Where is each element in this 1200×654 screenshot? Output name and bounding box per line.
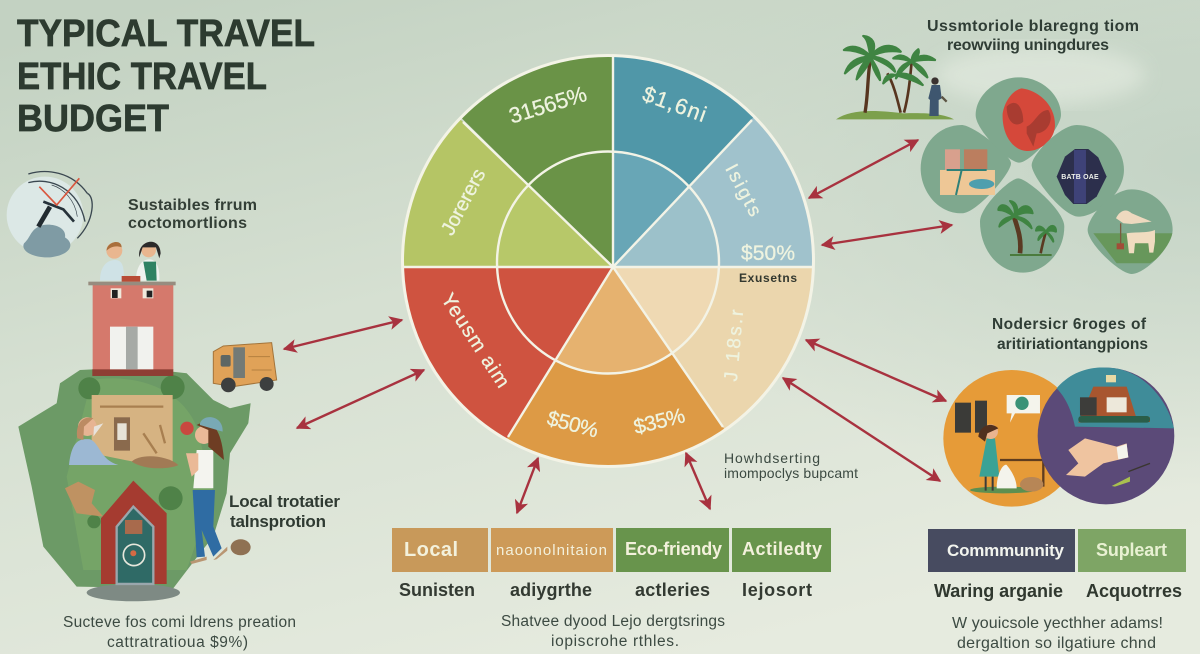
text: pie note: imompoclys bupcamt [724,465,858,481]
pie labels: $50% [545,407,601,443]
bottom budget boxes: naoonolnitaion [496,542,607,559]
title: TYPICAL TRAVEL [17,13,315,55]
bottom budget boxes: Actiledty [742,539,822,559]
text: pie note: Howhdserting [724,450,820,466]
blob: dark badge: BATB OAE [1061,174,1099,181]
text: pie note [724,450,858,481]
text: right caption: W youicsole yecthher adams! [952,615,1163,632]
purple circle: support [1038,367,1174,504]
pie labels: Yeusm aim [436,289,514,392]
text: left caption: Sucteve fos comi ldrens preation [63,614,296,631]
text: left caption: cattratratioua $9%) [107,634,248,651]
text: right heading: aritiriationtangpions [997,336,1148,353]
text: top right heading: Ussmtoriole blaregng tiom [927,18,1139,35]
box sublabels: Iejosort [742,580,812,600]
text: right heading: Nodersicr 6roges of [992,316,1147,333]
box sublabels: Sunisten [399,580,475,600]
blob: lodging map [921,125,1011,213]
box sublabels: actleries [635,580,710,600]
text: left caption [63,614,296,651]
text: bottom caption: iopiscrohe rthles. [551,633,679,650]
text: top right heading [927,18,1139,54]
icon: compass [7,172,92,257]
hill [18,367,251,588]
red chapel [101,481,167,584]
blob: dark badge [1032,125,1124,217]
text: bottom caption: Shatvee dyood Lejo dergtsrings [501,613,725,630]
vehicle: orange van [213,343,277,392]
building [93,285,173,370]
pie labels [436,81,795,443]
text: right caption: dergaltion so ilgatiure chnd [957,635,1156,652]
wheel outlines [402,56,814,466]
woman walking [193,450,213,488]
blob: red globe [976,77,1061,163]
pie labels: Isigts [720,161,765,220]
outer ring wedges [404,57,812,465]
bottom budget boxes: Eco-friendy [625,539,722,559]
right box sublabels: Acquotrres [1086,581,1182,601]
illustration: palm trees and traveller [836,36,954,119]
pie labels: $50% [741,242,795,265]
pie labels: 31565% [506,81,590,128]
icon cluster: sustainable choices [921,77,1173,274]
text: local transportation: talnsprotion [230,512,326,531]
right box sublabels: Waring arganie [934,581,1063,601]
right boxes: Commmunnity [947,541,1065,560]
illustration: hill with building and people [18,242,251,601]
venn illustration: community and support [943,367,1174,507]
blob: palm trees [980,178,1064,273]
right boxes: Supleart [1096,540,1167,560]
orange circle: community [943,370,1080,507]
parchment map [92,395,173,462]
people on roof [100,260,124,281]
pie labels: $35% [631,404,687,439]
right box sublabels [934,581,1182,601]
inner ring wedges [557,153,687,372]
blob: farm animal [1088,189,1173,274]
text: right caption [952,615,1163,652]
dog [65,482,103,517]
text: right heading [992,316,1148,353]
label: expenses: Exusetns [739,271,797,285]
bag [231,539,251,555]
text: sustainables heading: coctomortlions [128,215,247,232]
bottom budget boxes [392,528,831,572]
pie labels: J 18s.r [721,308,748,382]
text: local transportation: Local trotatier [229,492,340,511]
pie chart: budget wheel [401,54,815,468]
title [17,13,315,140]
box sublabels: adiygrthe [510,580,592,600]
bottom budget boxes: Local [404,539,458,561]
title: ETHIC TRAVEL [17,56,267,98]
text: local transportation [229,492,340,531]
seated person [69,439,118,465]
right boxes [928,529,1186,572]
text: sustainables heading [128,197,257,232]
arrows [284,140,952,513]
box sublabels [399,580,812,600]
title: BUDGET [17,98,169,140]
pie labels: $1,6ni [639,81,710,127]
pie labels: Jorerers [437,165,490,239]
text: top right heading: reowviing uningdures [947,37,1109,54]
text: bottom caption [501,613,725,650]
text: sustainables heading: Sustaibles frrum [128,197,257,214]
